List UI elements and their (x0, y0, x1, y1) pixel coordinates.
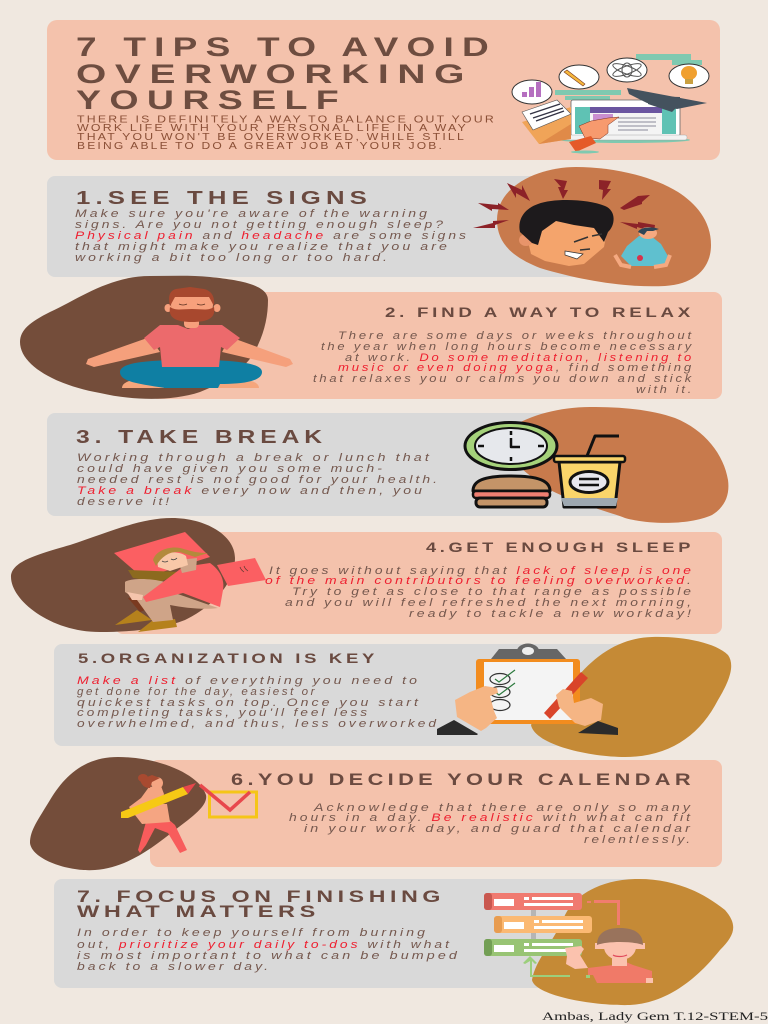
body 7: out, prioritize your daily to-dos with what (77, 939, 452, 951)
blob: brown (30, 757, 206, 870)
body 7: back to a slower day. (77, 961, 271, 973)
body 4: and you will feel refreshed the next morning, (285, 597, 694, 609)
body 2 (313, 330, 694, 396)
heading 4: 4.GET ENOUGH SLEEP (426, 539, 694, 555)
panel: 4 get enough sleep (11, 518, 722, 634)
body 2: the year when long hours become necessary (321, 341, 694, 353)
heading 5: 5.ORGANIZATION IS KEY (78, 650, 378, 666)
body 2: with it. (636, 384, 694, 396)
body 3: needed rest is not good for your health. (77, 474, 440, 486)
panel: 3 take break (47, 407, 728, 523)
icon: sleeping woman (114, 532, 266, 632)
blob: ochre (532, 879, 733, 1005)
body 1 (75, 208, 469, 264)
body 1: Physical pain and headache are some signs (75, 230, 469, 242)
body 1: that might make you realize that you are (75, 241, 450, 253)
body 6: in your work day, and guard that calendar (304, 823, 693, 835)
intro text: WORK LIFE WITH YOUR PERSONAL LIFE IN A WAY (77, 123, 468, 134)
body 2: that relaxes you or calms you down and stick (313, 373, 694, 385)
panel: 1 see the signs (47, 167, 711, 286)
intro text: THERE IS DEFINITELY A WAY TO BALANCE OUT YOUR (77, 114, 496, 126)
body 2: at work. Do some meditation, listening to (345, 352, 694, 364)
icon: woman with giant pencil and checkbox (121, 774, 256, 853)
heading 7: 7. FOCUS ON FINISHING (77, 887, 445, 906)
body 1: signs. Are you not getting enough sleep? (75, 219, 446, 231)
heading 3: 3. TAKE BREAK (76, 427, 327, 447)
body 5: get done for the day, easiest or (77, 686, 317, 698)
blob: brown (11, 518, 235, 632)
footer credit: Ambas, Lady Gem T.12-STEM-5 (542, 1009, 768, 1023)
icon: laptop and study illustration (512, 54, 709, 154)
panel: 7 focus on finishing what matters (54, 879, 733, 1005)
icon: clipboard with hands (437, 644, 618, 735)
body 5: Make a list of everything you need to (77, 675, 420, 687)
body 4: of the main contributors to feeling overworked . (265, 575, 694, 587)
panel: 2 find a way to relax (20, 276, 722, 399)
icon: headache face and bolts (473, 179, 670, 267)
body 4 (265, 565, 694, 620)
body 7: In order to keep yourself from burning (77, 927, 428, 939)
body 5: quickest tasks on top. Once you start (77, 697, 421, 709)
intro text (77, 114, 496, 152)
icon: meditating man (86, 287, 293, 388)
heading 7: WHAT MATTERS (77, 902, 320, 921)
icon: priority list and person (484, 893, 653, 983)
body 4: Try to get as close to that range as possible (292, 586, 694, 598)
body 2: music or even doing yoga , find something (338, 362, 694, 374)
panel: 6 you decide your calendar (30, 757, 722, 870)
blob: ochre (531, 637, 731, 757)
title: YOURSELF (76, 85, 347, 115)
body 6: Acknowledge that there are only so many (313, 802, 693, 814)
heading 6: 6.YOU DECIDE YOUR CALENDAR (231, 770, 695, 789)
title (76, 32, 497, 115)
intro text: THAT YOU WON'T BE OVERWORKED, WHILE STILL (77, 132, 466, 143)
body 3 (77, 452, 440, 508)
body 5: overwhelmed, and thus, less overworked (77, 718, 439, 730)
body 4: ready to tackle a new workday! (409, 608, 694, 620)
body 1: working a bit too long or too hard. (75, 252, 390, 264)
heading 2: 2. FIND A WAY TO RELAX (385, 305, 694, 320)
body 4: It goes without saying that lack of sleep is one (269, 565, 694, 577)
blob: orange (504, 407, 728, 523)
body 3: Working through a break or lunch that (77, 452, 432, 464)
blob: brown (20, 276, 268, 399)
body 6: relentlessly. (584, 834, 693, 846)
panel: header (47, 20, 720, 160)
title: 7 TIPS TO AVOID (76, 32, 497, 62)
body 5: completing tasks, you'll feel less (77, 707, 370, 719)
body 1: Make sure you're aware of the warning (75, 208, 430, 220)
title: OVERWORKING (76, 59, 473, 89)
body 6: hours in a day. Be realistic with what can fit (289, 812, 693, 824)
body 7 (77, 927, 460, 973)
body 3: could have given you some much- (77, 463, 385, 475)
heading 7 (77, 887, 445, 921)
body 3: deserve it! (77, 496, 172, 508)
body 2: There are some days or weeks throughout (338, 330, 694, 342)
body 5 (77, 675, 439, 730)
body 6 (289, 802, 693, 846)
blob: orange (497, 167, 711, 286)
panel: 5 organization is key (54, 637, 731, 757)
intro text: BEING ABLE TO DO A GREAT JOB AT YOUR JOB. (77, 141, 444, 152)
icon: clock, drink and burger (465, 422, 625, 507)
body 7: is most important to what can be bumped (77, 950, 460, 962)
heading 1: 1.SEE THE SIGNS (76, 188, 372, 208)
body 3: Take a break every now and then, you (77, 485, 425, 497)
